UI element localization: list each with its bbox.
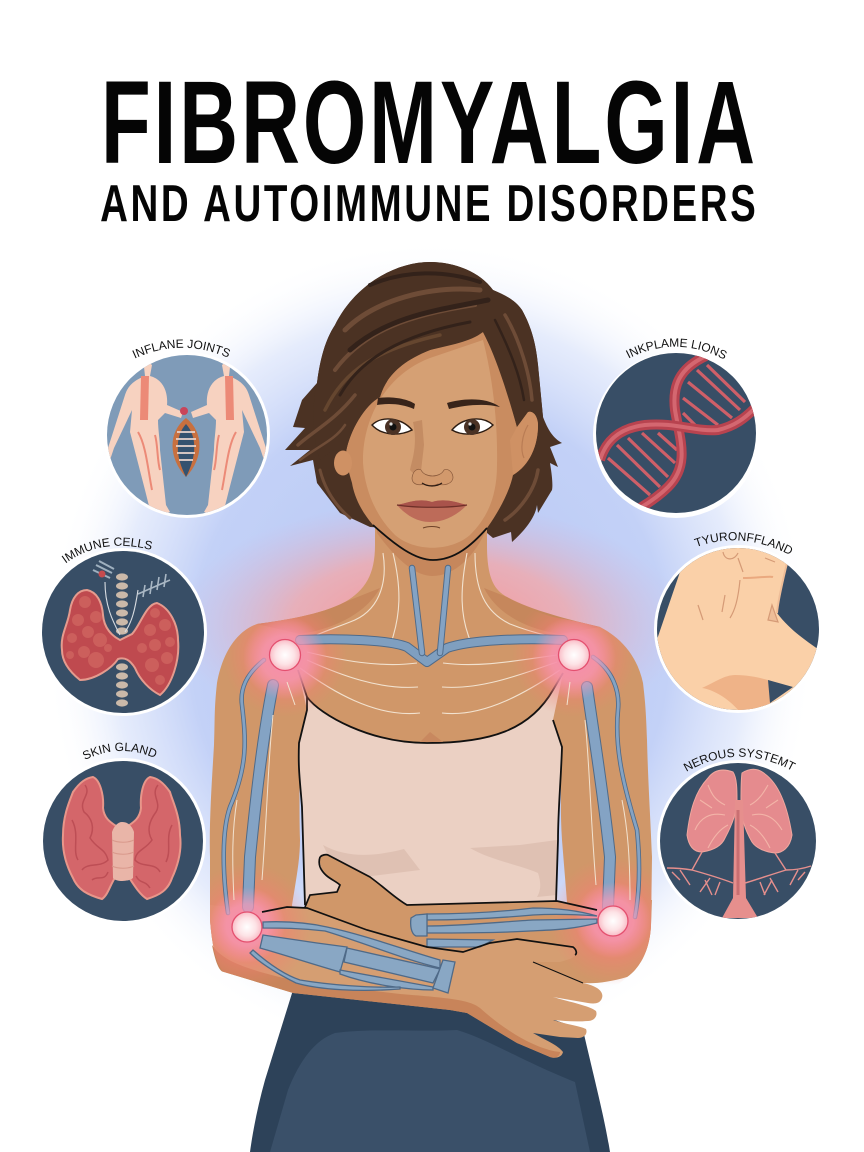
panel: nervous system: NEROUS SYSTEMT — [683, 748, 796, 772]
eyes — [372, 419, 412, 434]
arm contour lines — [262, 855, 597, 983]
DNA capsule — [172, 418, 200, 477]
panel: inflamed joints — [107, 340, 270, 518]
panel: inflamed joints: INFLANE JOINTS — [132, 340, 230, 358]
ears — [334, 412, 538, 476]
panel: skin gland — [43, 742, 206, 921]
jaw line — [373, 525, 487, 560]
arm white nerve lines — [233, 682, 630, 900]
inflamed cell — [98, 570, 106, 578]
pink fade of vessels near joints — [209, 616, 651, 963]
left forearm and hand — [210, 905, 602, 1058]
eyebrows — [377, 397, 415, 409]
right arm with hand on torso — [305, 855, 652, 990]
panel: skin gland: SKIN GLAND — [82, 742, 156, 759]
red glow on joints — [210, 613, 652, 982]
panel: DNA — [593, 338, 756, 518]
woman figure — [210, 262, 652, 1152]
title: AND AUTOIMMUNE DISORDERS — [100, 174, 756, 232]
joints — [232, 640, 628, 942]
skirt — [250, 990, 610, 1152]
panel: skin: TYURONFFLAND — [694, 532, 792, 554]
blue splint on right forearm — [411, 908, 597, 947]
camisole top — [298, 670, 563, 907]
panel: nervous system — [657, 748, 816, 919]
face — [346, 332, 538, 560]
title: FIBROMYALGIA — [101, 57, 755, 189]
blue nerves and vessels — [224, 568, 639, 917]
back hair — [285, 262, 562, 542]
left body — [108, 358, 183, 516]
thyroid — [62, 590, 178, 695]
neck and trapezius shading — [257, 520, 600, 634]
lips — [397, 500, 467, 522]
panel: DNA: INKPLAME LIONS — [626, 338, 727, 359]
arm underside shading — [212, 945, 560, 1058]
body: neck, shoulders and upper arms — [210, 520, 652, 977]
spine — [116, 573, 128, 707]
neck nerve lines — [300, 553, 560, 714]
panel: immune cells: IMMUNE CELLS — [62, 537, 152, 563]
blue splint on left forearm — [250, 922, 455, 993]
nerves — [93, 561, 170, 635]
panel: immune cells — [42, 537, 207, 716]
front hair — [298, 262, 543, 520]
panel: skin — [654, 532, 819, 713]
right body — [191, 358, 266, 516]
chest — [299, 660, 563, 760]
background glow — [45, 240, 815, 1060]
